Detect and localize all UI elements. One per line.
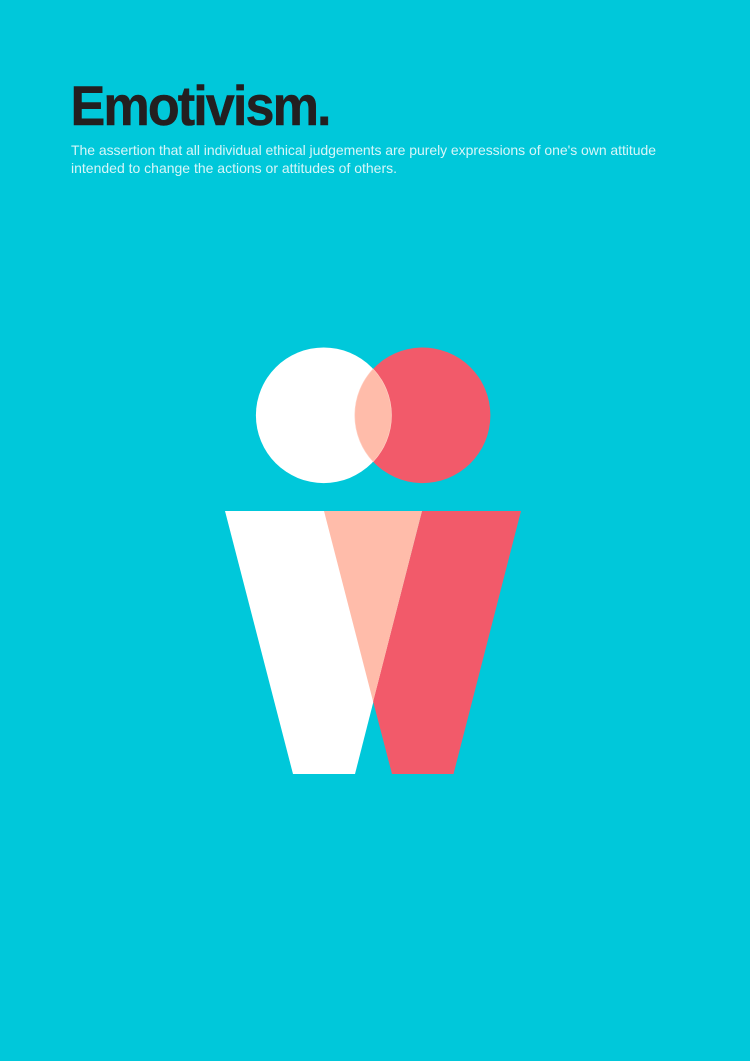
overlap: heads — [355, 369, 392, 462]
white figure — [225, 348, 422, 774]
overlap: bodies — [324, 511, 422, 702]
icon: two overlapping figures — [225, 347, 521, 774]
description text: The assertion that all individual ethical judgements are purely expressions of one's own attitude — [71, 142, 656, 158]
red figure — [373, 347, 521, 774]
title: Emotivism. — [70, 76, 332, 137]
description text — [71, 142, 656, 176]
description text: intended to change the actions or attitudes of others. — [71, 160, 397, 176]
